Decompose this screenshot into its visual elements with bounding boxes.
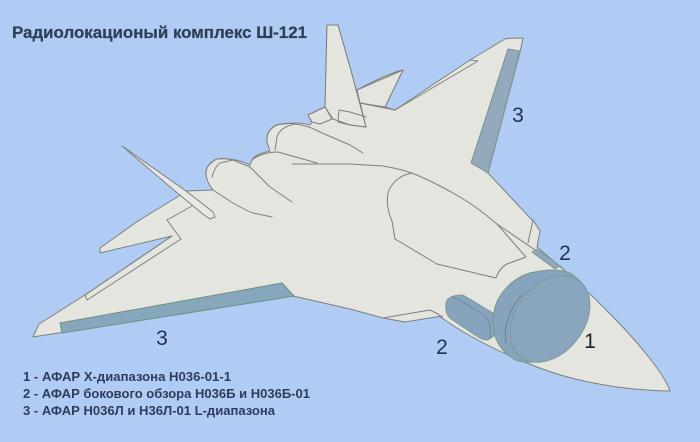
- legend: [23, 370, 310, 418]
- legend: 1 - АФАР Х-диапазона Н036-01-1: [23, 370, 231, 384]
- radar front disc: [494, 260, 606, 378]
- panel 3: right wing antenna: [471, 49, 520, 173]
- fin root block: [308, 107, 332, 124]
- title: Радиолокационый комплекс Ш-121: [12, 23, 307, 42]
- antenna top face edge: [452, 297, 490, 338]
- upper engine nacelle: [268, 124, 350, 165]
- panel 2: upper side antenna: [532, 249, 560, 269]
- aircraft: [33, 25, 670, 391]
- legend: 3 - АФАР Н036Л и Н36Л-01 L-диапазона: [23, 404, 276, 418]
- label 3 right: 3: [512, 104, 524, 127]
- surface detail lines: [85, 60, 563, 318]
- radar rim line: [505, 294, 523, 343]
- label 1: 1: [584, 330, 596, 353]
- label 2 upper: 2: [559, 242, 571, 265]
- fin: [325, 25, 366, 127]
- label 2 lower: 2: [436, 336, 448, 359]
- label 3 left: 3: [156, 327, 168, 350]
- panel 3: left wing antenna: [60, 283, 294, 333]
- legend: 2 - АФАР бокового обзора Н036Б и Н036Б-01: [23, 387, 310, 401]
- left pylon rod: [122, 146, 215, 219]
- right tailplane: [357, 70, 403, 107]
- panel 1: nose radar: [493, 260, 606, 378]
- airframe silhouette: [33, 25, 670, 391]
- radar drum: [493, 270, 588, 362]
- antenna body: [446, 295, 494, 340]
- panel 2: lower side antenna: [446, 295, 494, 340]
